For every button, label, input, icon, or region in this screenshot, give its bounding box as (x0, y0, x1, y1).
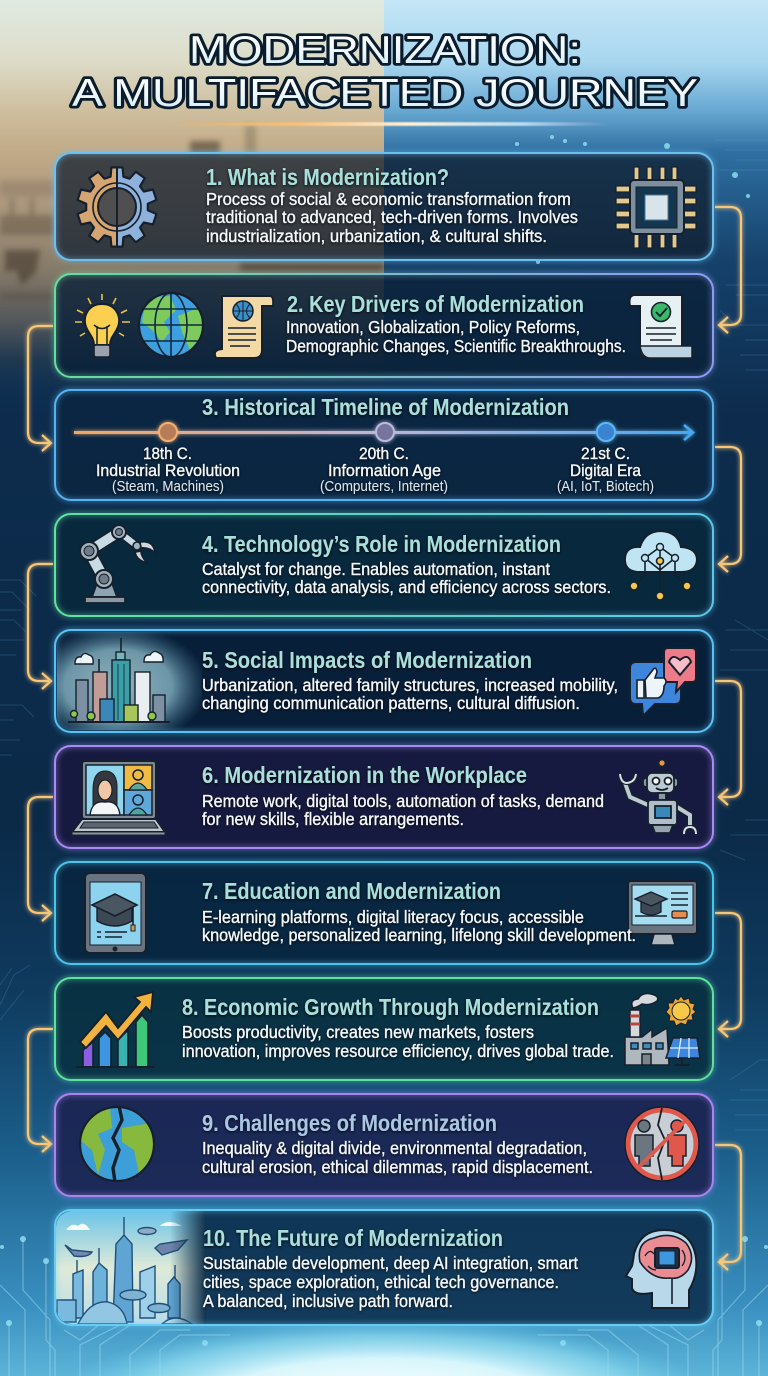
connector arrow 5 to 6 (715, 681, 741, 805)
icon: prohibited divide (625, 1107, 699, 1181)
text block 7: knowledge, personalized learning, lifelong skill development. (202, 925, 636, 945)
text block 2: Innovation, Globalization, Policy Reforms, (286, 317, 580, 337)
text block 9: Inequality & digital divide, environmental degradation, (202, 1138, 587, 1158)
icon: factory and solar (625, 994, 700, 1065)
circuit traces (0, 140, 768, 1130)
icon: robot (620, 760, 696, 834)
icon: cracked globe (80, 1106, 156, 1182)
icon: growth chart (76, 992, 155, 1067)
text block 4 (202, 531, 611, 597)
title: A MULTIFACETED JOURNEY (72, 72, 698, 115)
connector arrow 3 to 4 (715, 447, 741, 572)
timeline label 20th century: 20th C. (359, 445, 409, 463)
text block 5 (202, 647, 618, 713)
icon: laptop video call (72, 761, 165, 835)
text block 5: 5. Social Impacts of Modernization (202, 647, 532, 673)
icon: monitor with cap (628, 881, 697, 945)
icon: cloud network (625, 531, 697, 600)
timeline label 18th century: Industrial Revolution (96, 462, 240, 480)
title underline glow (170, 122, 610, 126)
icon: globe (139, 293, 206, 357)
text block 6: for new skills, flexible arrangements. (202, 809, 464, 829)
timeline (74, 423, 693, 441)
icon: social media bubbles (630, 648, 696, 716)
icon: approved document (630, 295, 692, 358)
panel 8: economic growth (55, 978, 713, 1080)
illustration: futuristic city (56, 1211, 206, 1325)
icon: head with AI brain (626, 1230, 696, 1308)
text block 1: industrialization, urbanization, & cultural shifts. (206, 226, 547, 246)
text block 6: 6. Modernization in the Workplace (202, 762, 527, 788)
title (72, 29, 698, 115)
timeline label 18th century (96, 445, 240, 495)
text block 9: cultural erosion, ethical dilemmas, rapid displacement. (202, 1157, 593, 1177)
connector arrow 9 to 10 (715, 1145, 741, 1270)
icon: robot arm (80, 525, 155, 603)
icon: light bulb (75, 294, 130, 357)
text block 8: innovation, improves resource efficiency, drives global trade. (182, 1041, 614, 1061)
text block 2 (286, 291, 626, 356)
text block 9 (202, 1110, 593, 1177)
panel 9: challenges (55, 1094, 713, 1196)
text block 10: cities, space exploration, ethical tech governance. (203, 1272, 559, 1292)
heading 3: 3. Historical Timeline of Modernization (202, 394, 569, 420)
text block 6 (202, 762, 604, 829)
text block 1: traditional to advanced, tech-driven forms. Involves (206, 207, 578, 227)
text block 8: Boosts productivity, creates new markets, fosters (182, 1022, 534, 1042)
panel 3: historical timeline (55, 390, 713, 500)
bottom circuit traces (0, 1240, 768, 1376)
panel 10: future (55, 1210, 713, 1325)
timeline label 20th century: Information Age (328, 462, 441, 480)
icon: city skyline (68, 638, 170, 722)
timeline label 20th century: (Computers, Internet) (320, 479, 448, 495)
connector arrow 6 to 7 (28, 797, 53, 921)
timeline label 18th century: (Steam, Machines) (112, 479, 224, 495)
text block 6: Remote work, digital tools, automation of tasks, demand (202, 791, 604, 811)
text block 10: 10. The Future of Modernization (203, 1225, 503, 1251)
text block 2: 2. Key Drivers of Modernization (287, 291, 584, 317)
text block 7: 7. Education and Modernization (202, 878, 501, 904)
timeline label 21st century (557, 445, 654, 495)
panel 6: workplace (55, 746, 713, 848)
panel 1: what is modernization (55, 153, 713, 260)
text block 4: connectivity, data analysis, and efficiency across sectors. (202, 577, 611, 597)
title: MODERNIZATION: (189, 29, 581, 72)
connector arrow 1 to 2 (715, 207, 741, 333)
timeline label 21st century: 21st C. (581, 445, 630, 463)
text block 10 (203, 1225, 578, 1311)
text block 2: Demographic Changes, Scientific Breakthroughs. (286, 336, 626, 356)
timeline label 20th century (320, 445, 448, 495)
panel 2: key drivers (55, 274, 713, 377)
icon: policy scroll (215, 296, 273, 358)
icon: half gear (78, 167, 156, 247)
text block 8: 8. Economic Growth Through Modernization (182, 994, 599, 1020)
timeline label 21st century: (AI, IoT, Biotech) (557, 479, 654, 495)
connector arrow 7 to 8 (715, 913, 741, 1037)
timeline label 18th century: 18th C. (143, 445, 192, 463)
text block 4: Catalyst for change. Enables automation, instant (202, 559, 550, 579)
text block 7: E-learning platforms, digital literacy focus, accessible (202, 907, 584, 927)
icon: tablet with cap (85, 873, 146, 953)
connector arrow 2 to 3 (28, 326, 53, 451)
text block 1: Process of social & economic transformation from (206, 189, 571, 209)
text block 5: Urbanization, altered family structures, increased mobility, (202, 675, 618, 695)
icon: microchip (616, 167, 696, 248)
panel 5: social impacts (55, 630, 713, 732)
text block 7 (202, 878, 636, 945)
panel 7: education (55, 862, 713, 964)
text block 9: 9. Challenges of Modernization (202, 1110, 497, 1136)
text block 8 (182, 994, 614, 1061)
connector arrow 8 to 9 (28, 1029, 53, 1152)
connector arrow 4 to 5 (28, 564, 53, 689)
text block 1: 1. What is Modernization? (206, 164, 449, 190)
timeline label 21st century: Digital Era (570, 462, 642, 480)
text block 10: A balanced, inclusive path forward. (203, 1291, 453, 1311)
text block 1 (206, 164, 578, 246)
text block 10: Sustainable development, deep AI integration, smart (203, 1253, 578, 1273)
panel 4: technology role (55, 514, 713, 616)
text block 5: changing communication patterns, cultural diffusion. (202, 693, 580, 713)
text block 4: 4. Technology’s Role in Modernization (202, 531, 561, 557)
